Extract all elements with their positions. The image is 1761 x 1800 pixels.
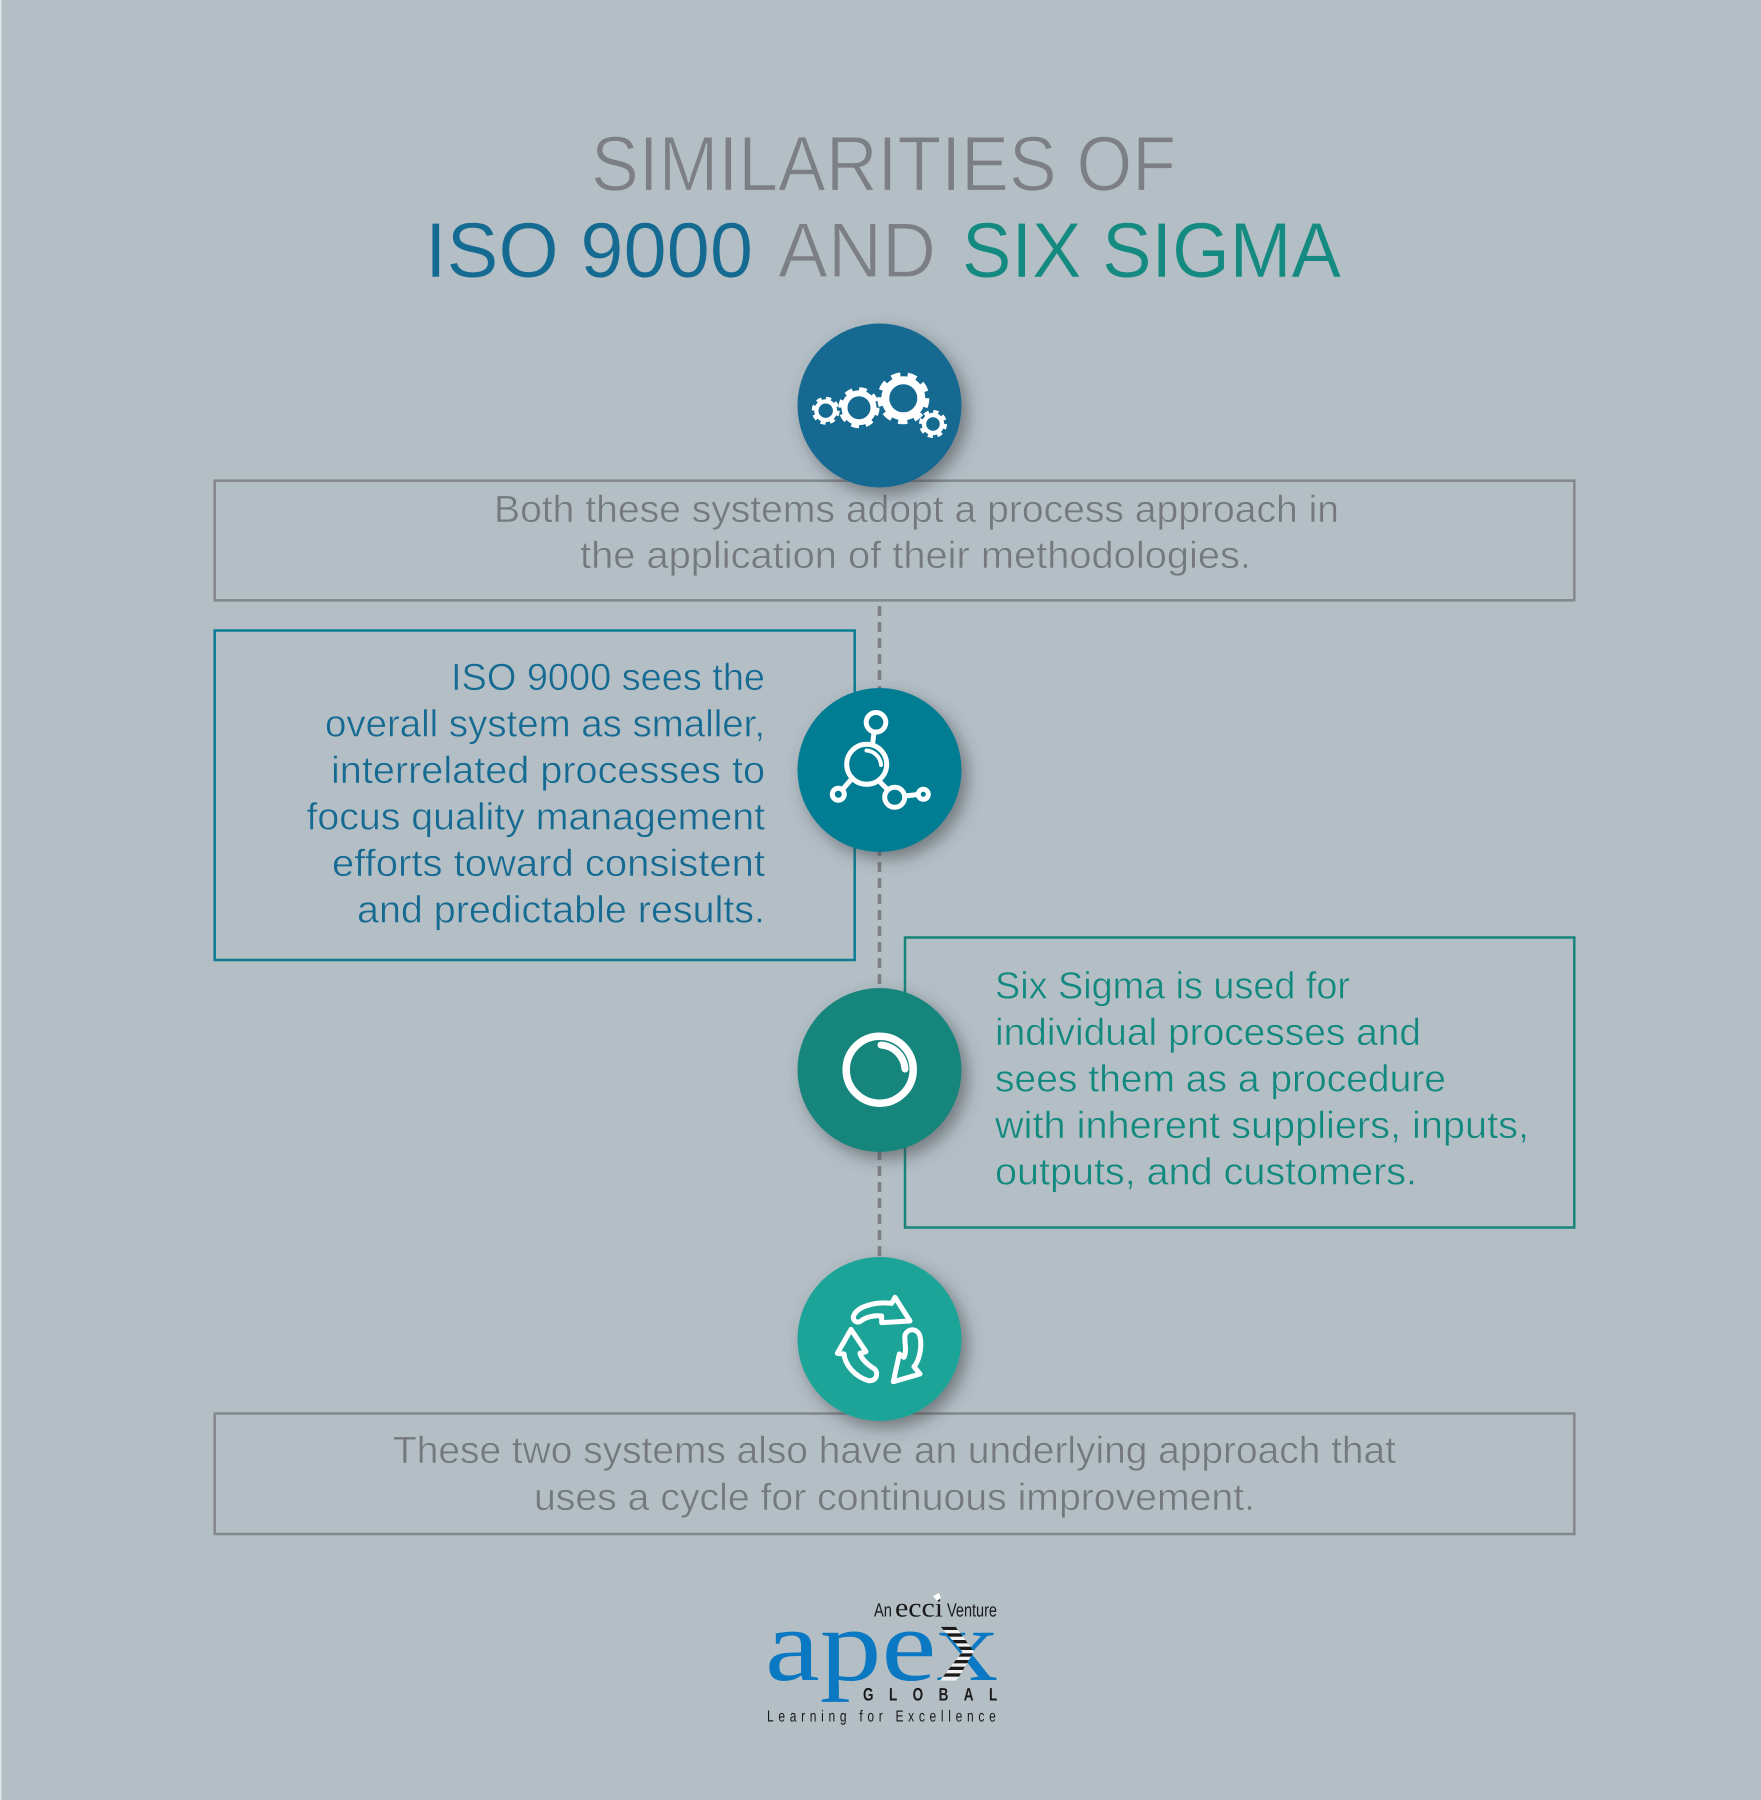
panel: ISO 9000: overall system as smaller, xyxy=(325,703,765,745)
panel: continuous improvement: These two systems also have an underlying approach that xyxy=(393,1430,1396,1472)
panel: Six Sigma: individual processes and xyxy=(995,1012,1421,1054)
panel: continuous improvement: uses a cycle for continuous improvement. xyxy=(534,1477,1255,1519)
title: ISO 9000 xyxy=(425,206,753,294)
panel: Six Sigma: outputs, and customers. xyxy=(995,1151,1417,1193)
title: AND xyxy=(778,206,936,294)
logo: apex global xyxy=(765,1589,998,1726)
panel: ISO 9000: interrelated processes to xyxy=(331,750,765,792)
icon: gears xyxy=(798,324,962,488)
title: SIMILARITIES OF xyxy=(591,120,1176,208)
panel: Six Sigma xyxy=(905,938,1574,1228)
logo: apex global: Venture xyxy=(947,1600,997,1622)
icon: recycle arrows xyxy=(798,1257,962,1421)
icon: circle bubble xyxy=(798,988,962,1152)
panel: process approach: Both these systems adopt a process approach in xyxy=(494,489,1339,531)
panel: Six Sigma: Six Sigma is used for xyxy=(995,965,1350,1007)
title: SIX SIGMA xyxy=(962,206,1341,294)
panel: ISO 9000 xyxy=(215,630,855,960)
title xyxy=(425,120,1341,294)
panel: ISO 9000: focus quality management xyxy=(306,796,765,838)
logo: apex global: apex xyxy=(765,1589,998,1703)
logo: apex global: An xyxy=(874,1600,892,1622)
logo: apex global: ecci xyxy=(895,1592,943,1622)
dashed connector line xyxy=(878,606,881,1260)
logo: apex global: GLOBAL xyxy=(863,1685,997,1705)
panel: ISO 9000: efforts toward consistent xyxy=(332,843,765,885)
panel: Six Sigma: sees them as a procedure xyxy=(995,1058,1446,1100)
panel: continuous improvement xyxy=(215,1414,1574,1534)
panel: Six Sigma: with inherent suppliers, inputs, xyxy=(994,1105,1529,1147)
panel: process approach xyxy=(215,481,1574,600)
panel: process approach: the application of their methodologies. xyxy=(580,535,1251,577)
panel: ISO 9000: ISO 9000 sees the xyxy=(451,657,765,699)
icon: molecule xyxy=(798,688,962,852)
logo: apex global: Learning for Excellence xyxy=(767,1709,996,1726)
panel: ISO 9000: and predictable results. xyxy=(357,889,765,931)
